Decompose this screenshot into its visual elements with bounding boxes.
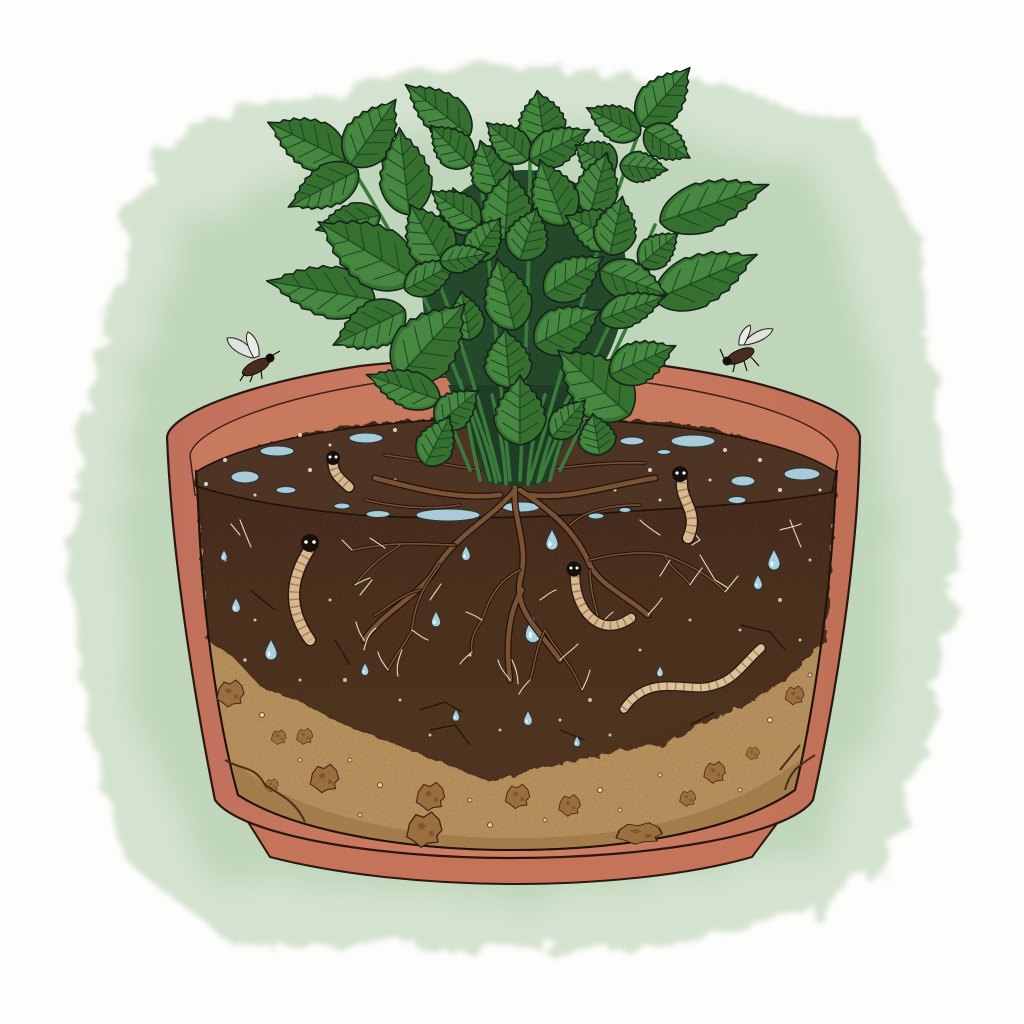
sand pebbles — [243, 658, 812, 828]
soil cutaway — [196, 417, 836, 850]
pot inner back wall — [190, 375, 838, 495]
plant stems — [350, 130, 655, 484]
worm: center curled — [566, 562, 631, 626]
soil surface puddles — [231, 433, 820, 521]
pot — [167, 358, 860, 858]
saucer — [248, 822, 778, 884]
soil grain — [200, 420, 832, 778]
backdrop outer wash — [68, 62, 960, 950]
worm: surface right — [672, 466, 692, 538]
central foliage shadow — [422, 170, 626, 400]
worm: lower right — [624, 648, 761, 709]
soil specks — [224, 558, 812, 736]
sand cracks — [225, 745, 815, 822]
root outline — [364, 478, 655, 680]
white rootlets — [231, 520, 801, 694]
backdrop inner wash — [125, 125, 895, 900]
watercolor green backdrop — [68, 62, 960, 950]
worm: left vertical — [294, 534, 319, 640]
roots — [352, 455, 725, 690]
stem fan at soil — [448, 385, 592, 486]
sand grain — [198, 500, 835, 850]
soil surface — [196, 418, 836, 518]
surface specks — [204, 428, 822, 502]
insect: left fly — [227, 332, 280, 382]
thin roots outline — [352, 455, 725, 690]
thin roots fill — [352, 455, 725, 690]
lower sand shading — [232, 760, 800, 850]
soil cracks — [250, 590, 785, 745]
surface grain — [196, 418, 836, 518]
insect: right fly — [720, 325, 773, 372]
leaves: back layer — [257, 53, 777, 367]
root fill — [364, 478, 655, 680]
worm: surface left — [326, 451, 349, 487]
leaves: front layer — [360, 252, 685, 474]
pot body — [167, 358, 860, 858]
sand clods — [217, 680, 804, 847]
pot front wall outlines — [196, 470, 837, 850]
leaves: middle layer — [302, 151, 689, 343]
sand layer — [198, 500, 835, 850]
water droplets — [221, 529, 780, 746]
dark soil mass — [196, 417, 836, 782]
